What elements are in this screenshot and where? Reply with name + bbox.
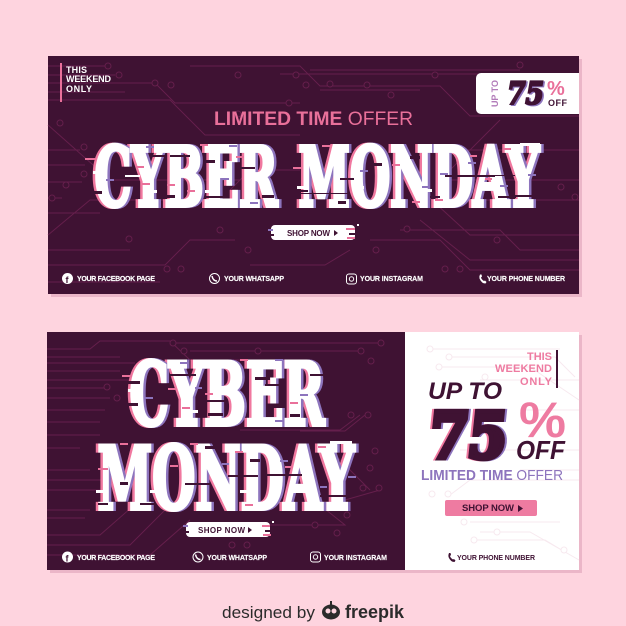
this weekend only tag: WEEKEND: [66, 74, 112, 84]
title: cyber monday top: CYBER: [94, 130, 278, 226]
footer: top contacts: YOUR FACEBOOK PAGE: [77, 276, 155, 283]
icon: whatsapp: [210, 274, 220, 284]
this weekend only tag: [60, 63, 112, 102]
icon: facebook: f: [66, 275, 70, 285]
title: cyber monday bottom: MONDAY: [100, 427, 358, 530]
contact: phone number: YOUR PHONE NUMBER: [457, 555, 535, 562]
footer: top contacts: YOUR INSTAGRAM: [360, 276, 423, 283]
footer: bottom contacts: YOUR WHATSAPP: [207, 555, 267, 562]
icon: instagram: [310, 552, 320, 562]
title: cyber monday bottom: [95, 343, 358, 530]
footer: top contacts: YOUR PHONE NUMBER: [487, 276, 565, 283]
button: shop now: [445, 500, 537, 516]
title: cyber monday bottom: CYBER: [127, 343, 323, 446]
icon: freepik mascot: [322, 601, 340, 620]
panel: top banner: [48, 56, 582, 297]
credit: designed by freepik: freepik: [345, 602, 405, 622]
footer: bottom contacts: YOUR INSTAGRAM: [324, 555, 387, 562]
button: shop now top: [268, 224, 359, 240]
icon: instagram: [346, 274, 356, 284]
limited time offer: LIMITED TIME OFFER: [421, 467, 563, 484]
button: shop now bottom: SHOP NOW: [198, 526, 245, 535]
title: cyber monday bottom: CYBER: [132, 343, 328, 446]
this weekend only tag: [495, 350, 558, 388]
heading: up to: UP TO: [428, 378, 502, 405]
footer: top contacts: [62, 273, 565, 285]
number: 75: 75: [425, 399, 511, 474]
heading: limited time offer: LIMITED TIME OFFER: [214, 109, 413, 130]
footer: top contacts: YOUR WHATSAPP: [224, 276, 284, 283]
off label: OFF: [516, 435, 566, 465]
title: cyber monday top: [85, 130, 543, 226]
this weekend only tag: THIS: [527, 351, 552, 363]
number: 75: 75: [423, 399, 509, 474]
percent sign: %: [519, 392, 566, 448]
button: shop now top: SHOP NOW: [287, 229, 330, 238]
title: cyber monday bottom: MONDAY: [98, 427, 355, 530]
badge: up to 75% off: %: [547, 78, 565, 100]
button: shop now: SHOP NOW: [462, 503, 514, 514]
number: 75: 75: [427, 399, 513, 474]
icon: whatsapp: [193, 552, 203, 562]
badge: up to 75% off: 75: [504, 76, 547, 112]
badge: up to 75% off: [476, 73, 579, 114]
panel: bottom banner dark: [47, 332, 582, 573]
credit: designed by freepik: designed by: [222, 603, 316, 622]
title: cyber monday top: CYBER: [97, 130, 280, 226]
this weekend only tag: ONLY: [520, 376, 553, 388]
title: cyber monday bottom: CYBER: [130, 343, 325, 446]
footer: bottom contacts: [62, 552, 387, 564]
icon: facebook: f: [66, 554, 70, 564]
badge: up to 75% off: UP TO: [490, 80, 500, 107]
footer: bottom contacts: YOUR FACEBOOK PAGE: [77, 555, 155, 562]
title: cyber monday bottom: MONDAY: [95, 427, 353, 530]
this weekend only tag: WEEKEND: [495, 363, 552, 375]
panel: bottom banner white offer: [405, 332, 579, 570]
credit: designed by freepik: [222, 601, 405, 622]
button: shop now bottom: [183, 521, 274, 537]
this weekend only tag: ONLY: [66, 84, 92, 94]
badge: up to 75% off: OFF: [548, 98, 568, 108]
icon: facebook: [62, 273, 73, 285]
this weekend only tag: THIS: [66, 65, 87, 75]
icon: phone: [479, 274, 486, 284]
icon: facebook: [62, 552, 73, 564]
badge: up to 75% off: 75: [505, 77, 548, 113]
title: cyber monday top: CYBER: [92, 130, 275, 226]
